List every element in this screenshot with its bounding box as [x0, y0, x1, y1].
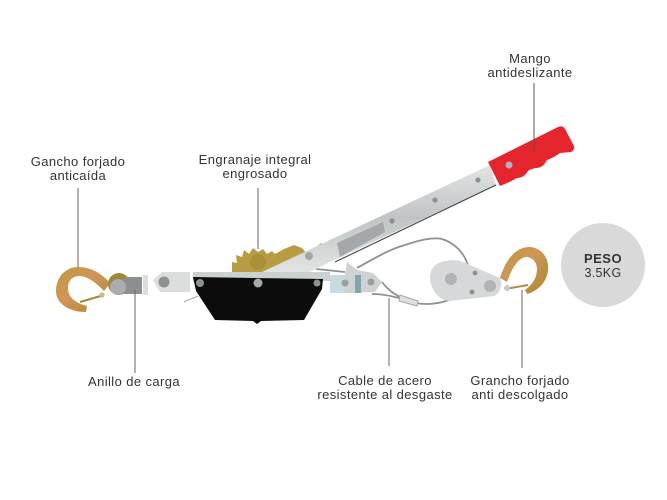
- label: gancho: [31, 154, 125, 183]
- badge title: PESO: [584, 251, 622, 266]
- leader line: grancho: [521, 290, 523, 368]
- label: mango: antideslizante: [487, 65, 573, 80]
- leader line: anillo: [134, 290, 136, 373]
- label: gancho: anticaída: [50, 168, 106, 183]
- wire cable: [316, 238, 468, 304]
- badge: peso: [561, 223, 645, 307]
- label: cable: Cable de acero: [338, 373, 432, 388]
- left hook: [56, 267, 110, 312]
- label: engranaje: [199, 152, 311, 181]
- leader line: engranaje: [257, 188, 259, 249]
- cable ferrule: [399, 295, 418, 306]
- label: engranaje: Engranaje integral: [199, 152, 311, 167]
- label: anillo: Anillo de carga: [88, 374, 180, 389]
- label: mango: [487, 51, 573, 80]
- label: grancho: [470, 373, 570, 402]
- label: gancho: Gancho forjado: [31, 154, 125, 169]
- red handle: [488, 126, 574, 186]
- badge value: 3.5KG: [585, 266, 621, 280]
- lever and shaft: [262, 165, 496, 272]
- label: grancho: anti descolgado: [471, 387, 569, 402]
- gear: [232, 243, 324, 272]
- leader line: cable: [388, 298, 390, 366]
- label: cable: resistente al desgaste: [317, 387, 453, 402]
- leader line: mango: [533, 83, 535, 151]
- left swivel ring: [108, 272, 190, 295]
- label: mango: Mango: [509, 51, 551, 66]
- label: grancho: Grancho forjado: [470, 373, 570, 388]
- frame: [193, 262, 382, 293]
- label: engranaje: engrosado: [222, 166, 288, 181]
- label: cable: [317, 373, 453, 402]
- black side plate: [184, 277, 323, 324]
- pulley block: [430, 260, 501, 301]
- leader line: gancho: [77, 188, 79, 267]
- right hook: [500, 247, 548, 294]
